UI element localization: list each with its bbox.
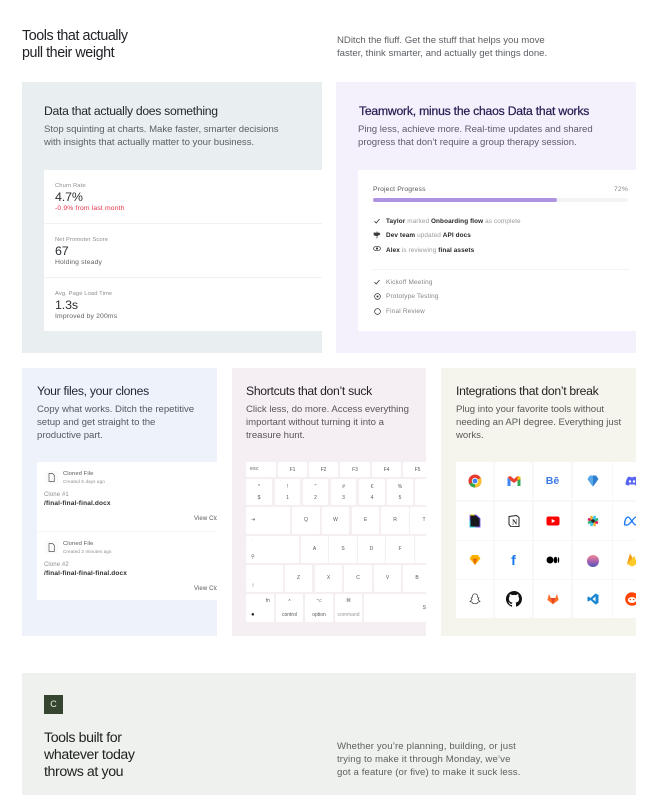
metric: churn rate: Churn Rate: [55, 183, 86, 189]
icon: snapchat: [456, 580, 493, 618]
row 3 keys: T: [422, 517, 426, 523]
row 3 keys: W: [333, 517, 338, 523]
panel: files: [22, 368, 217, 636]
activity: alex: Alex is reviewing final assets: [386, 246, 474, 254]
description: shortcuts: treasure hunt.: [246, 430, 305, 440]
description: files: [37, 404, 194, 440]
metric: net promoter score: [55, 237, 108, 266]
metric: net promoter score: Holding steady: [55, 259, 102, 266]
progress bar: [373, 198, 628, 202]
icon grid: [456, 462, 636, 618]
file list card: [37, 462, 217, 600]
row 4 keys: [246, 536, 426, 563]
row 1 keys: F1: [290, 467, 295, 473]
icon: sketch: [456, 541, 493, 579]
heading: teamwork: Teamwork, minus the chaos Data that works: [359, 104, 589, 118]
icon: gradient circle: [573, 541, 612, 579]
description: integrations: works.: [456, 430, 484, 440]
milestone: kickoff meeting: Kickoff Meeting: [386, 278, 433, 286]
metric: page load time: Avg. Page Load Time: [55, 291, 112, 297]
icon: medium: [534, 541, 571, 579]
description: teamwork: Ping less, achieve more. Real-time updates and shared: [358, 124, 593, 135]
row 1 keys: F4: [384, 467, 389, 473]
row 5 keys: C: [356, 575, 360, 581]
row 1 keys: esc: [250, 466, 259, 472]
metric: page load time: Improved by 200ms: [55, 313, 117, 320]
icon: github: [495, 580, 532, 618]
closing heading: Tools built for: [44, 730, 122, 746]
row 1 keys: [246, 462, 426, 477]
logo badge: C: [50, 699, 57, 709]
row 2 keys: 4: [371, 495, 373, 501]
row 4 keys: S: [341, 546, 345, 552]
row 5 keys: V: [386, 575, 389, 581]
icon: notion: [495, 502, 532, 540]
row 3 keys: ⇥: [251, 517, 255, 523]
panel: integrations: [441, 368, 636, 636]
heading: data: Data that actually does something: [44, 104, 218, 118]
row 6 keys: control: [282, 612, 297, 618]
row 5 keys: B: [415, 575, 419, 581]
title: pull their weight: [22, 45, 114, 61]
file entry 2: [44, 541, 217, 592]
file entry 2: Created 2 minutes ago: [63, 548, 112, 554]
row 6 keys: [246, 594, 426, 622]
milestone: final review: Final Review: [386, 308, 425, 314]
metric: page load time: [55, 291, 117, 320]
row 2 keys: $: [258, 495, 260, 501]
title: [22, 28, 128, 61]
description: data: Stop squinting at charts. Make faster, smarter decisions: [44, 124, 279, 135]
closing description: got a feature (or five) to make it suck less.: [337, 766, 520, 778]
description: data: [44, 124, 279, 148]
icon: vs code: [573, 580, 612, 618]
description: integrations: [456, 404, 622, 440]
row 5 keys: X: [327, 575, 330, 581]
description: integrations: Plug into your favorite tools without: [456, 404, 604, 414]
logo badge: [44, 695, 63, 714]
icon: chrome: [456, 462, 493, 500]
icon: file: [45, 541, 58, 554]
progress value: 72%: [614, 186, 628, 193]
metric: net promoter score: Net Promoter Score: [55, 237, 108, 243]
intro text: [337, 35, 547, 59]
row 6 keys: fn: [266, 598, 270, 604]
closing description: trying to make it through Monday, we’ve: [337, 754, 511, 764]
file entry 1: Clone #1: [44, 492, 69, 498]
panel: closing banner: [22, 673, 636, 795]
icon: youtube: [534, 502, 571, 540]
row 1 keys: F2: [321, 467, 326, 473]
icon: gmail: [495, 462, 532, 500]
row 2 keys: €: [371, 484, 373, 490]
file entry 1: /final-final-final.docx: [44, 500, 111, 507]
description: data: with insights that actually matter to your business.: [44, 137, 254, 148]
row 2 keys: 5: [399, 495, 401, 501]
description: shortcuts: Click less, do more. Access everything: [246, 404, 409, 414]
row 4 keys: F: [398, 546, 402, 552]
row 2 keys: *: [258, 484, 260, 490]
description: shortcuts: important without turning it into a: [246, 416, 384, 428]
description: files: productive part.: [37, 430, 103, 440]
row 2 keys: 1: [286, 495, 289, 501]
description: files: Copy what works. Ditch the repetitive: [37, 404, 194, 414]
row 4 keys: A: [313, 546, 316, 552]
icon: notion: N: [512, 518, 517, 526]
row 6 keys: ^: [288, 599, 291, 605]
row 5 keys: [246, 565, 426, 592]
row 5 keys: Z: [297, 575, 300, 581]
row 2 keys: 3: [342, 495, 345, 501]
row 6 keys: command: [338, 612, 359, 618]
file entry 1: Cloned File: [63, 471, 93, 477]
icon: facebook: f: [511, 552, 516, 568]
row 6 keys: option: [312, 612, 326, 618]
row 6 keys: S: [423, 605, 426, 611]
closing heading: throws at you: [44, 764, 123, 780]
progress label: Project Progress: [373, 186, 426, 193]
icon: dropbox-like gem: [573, 462, 612, 500]
row 3 keys: E: [364, 517, 367, 523]
icon: behance: [534, 462, 571, 500]
row 2 keys: !: [287, 484, 288, 490]
row 2 keys: [246, 479, 426, 505]
description: shortcuts: [246, 404, 409, 440]
icon: jira-like file: [456, 502, 493, 540]
closing description: [337, 740, 520, 778]
panel: teamwork: [336, 82, 636, 353]
description: integrations: needing an API degree. Everything just: [456, 416, 621, 428]
row 6 keys: ●: [251, 612, 255, 618]
row 5 keys: ⇧: [251, 583, 255, 589]
icon: gitlab: [534, 580, 571, 618]
row 2 keys: ": [315, 484, 316, 490]
icon: firebase: [613, 541, 650, 579]
intro text: faster, think smarter, and actually get things done.: [337, 48, 547, 59]
metric: churn rate: -0.9% from last month: [55, 205, 125, 212]
file entry 2: Clone #2: [44, 562, 69, 568]
row 3 keys: Q: [304, 517, 308, 523]
icon: behance: Bē: [546, 475, 559, 487]
icon: meta: [613, 502, 650, 540]
description: teamwork: [358, 124, 593, 148]
row 1 keys: F5: [415, 467, 420, 473]
row 3 keys: [246, 507, 426, 534]
row 4 keys: D: [370, 546, 373, 552]
panel: data: [22, 82, 322, 353]
row 6 keys: ⌘: [346, 598, 351, 604]
closing description: Whether you’re planning, building, or just: [337, 740, 516, 752]
intro text: NDitch the fluff. Get the stuff that helps you move: [337, 35, 545, 46]
activity: taylor: Taylor marked Onboarding flow as complete: [386, 218, 521, 224]
keyboard: [246, 462, 426, 622]
progress card: [358, 170, 636, 331]
metrics card: [44, 170, 322, 331]
icon: file: [45, 471, 58, 484]
file entry 1: [44, 471, 217, 522]
row 2 keys: 2: [314, 495, 317, 501]
milestone: prototype testing: Prototype Testing: [386, 293, 439, 300]
row 2 keys: %: [398, 484, 402, 490]
panel: shortcuts: [232, 368, 426, 636]
description: files: setup and get straight to the: [37, 416, 155, 428]
row 2 keys: #: [342, 484, 345, 490]
metric: net promoter score: 67: [55, 244, 69, 258]
metric: page load time: 1.3s: [55, 298, 78, 312]
closing heading: [44, 730, 135, 780]
row 6 keys: ⌥: [316, 598, 322, 604]
activity: dev team: Dev team updated API docs: [386, 232, 471, 239]
heading: shortcuts: Shortcuts that don’t suck: [246, 384, 372, 398]
icon: facebook: [495, 541, 532, 579]
file entry 1: Created 5 days ago: [63, 478, 105, 484]
row 4 keys: ⚲: [251, 554, 255, 560]
metric: churn rate: [55, 183, 125, 212]
file entry 2: /final-final-final-final.docx: [44, 570, 127, 577]
icon: reddit: [613, 580, 650, 618]
title: Tools that actually: [22, 28, 128, 44]
row 4 keys: ·: [251, 538, 253, 544]
icon: discord: [613, 462, 650, 500]
metric: churn rate: 4.7%: [55, 190, 83, 204]
description: teamwork: progress that don’t require a group therapy session.: [358, 137, 577, 148]
icon: slack: [573, 502, 612, 540]
row 1 keys: F3: [352, 467, 358, 473]
closing heading: whatever today: [44, 747, 135, 763]
row 3 keys: R: [393, 517, 397, 523]
heading: files: Your files, your clones: [37, 384, 149, 398]
file entry 2: Cloned File: [63, 541, 93, 547]
heading: integrations: Integrations that don’t break: [456, 384, 598, 398]
